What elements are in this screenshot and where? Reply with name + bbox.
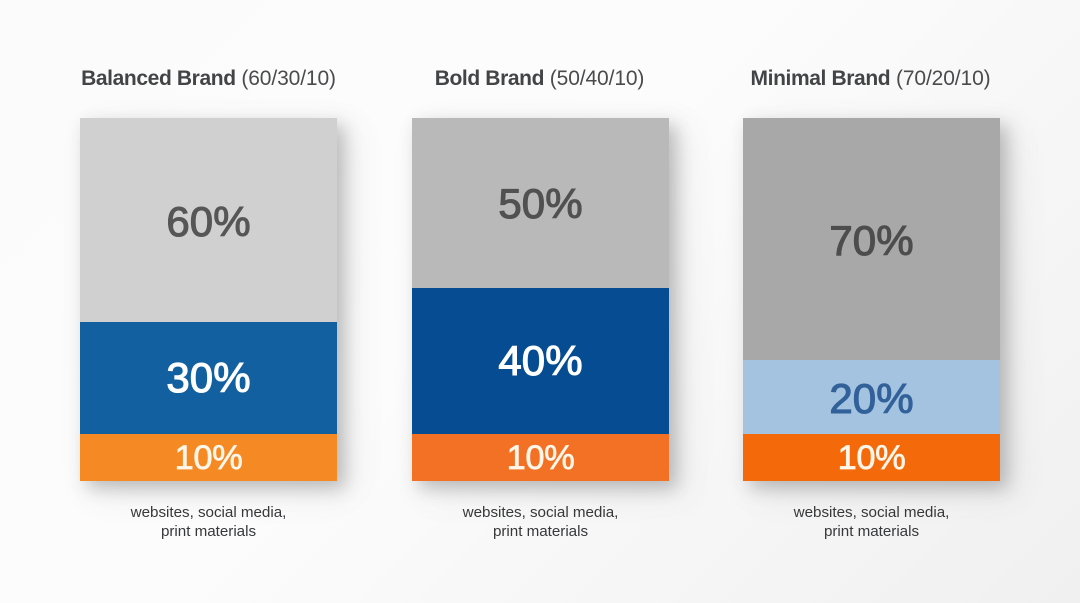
- segment: 10%: [743, 434, 1000, 481]
- segment: 70%: 70%: [829, 217, 914, 264]
- segment: 30%: 30%: [166, 354, 251, 401]
- caption: use cases: [794, 504, 949, 540]
- heading: Bold Brand: Bold Brand (50/40/10): [435, 67, 644, 90]
- segment: 10%: 10%: [175, 438, 242, 476]
- caption: use cases: [130, 504, 286, 540]
- heading: Minimal Brand: Minimal Brand (70/20/10): [750, 67, 990, 90]
- caption: use cases: [462, 504, 618, 540]
- segment: 60%: 60%: [166, 198, 251, 245]
- caption: use cases: websites, social media,: [794, 504, 949, 521]
- segment: 20%: [743, 360, 1000, 434]
- panel: Bold Brand: [408, 67, 691, 540]
- segment: 10%: 10%: [507, 438, 574, 476]
- caption: use cases: websites, social media,: [463, 504, 618, 521]
- segment: 40%: [412, 288, 669, 434]
- stacked bar: 60/30/10: [80, 118, 337, 481]
- segment: 50%: 50%: [498, 180, 583, 227]
- segment: 20%: 20%: [829, 375, 914, 422]
- segment: 60%: [80, 118, 337, 322]
- segment: 30%: [80, 322, 337, 434]
- stacked bar: 70/20/10: [743, 118, 1000, 481]
- caption: use cases: print materials: [824, 522, 919, 540]
- segment: 50%: [412, 118, 669, 288]
- panel: Minimal Brand: [739, 67, 1022, 540]
- panel: Balanced Brand: [76, 67, 359, 540]
- segment: 40%: 40%: [498, 337, 583, 384]
- segment: 10%: 10%: [838, 438, 905, 476]
- segment: 10%: [80, 434, 337, 481]
- segment: 10%: [412, 434, 669, 481]
- heading: Balanced Brand: Balanced Brand (60/30/10): [81, 67, 336, 90]
- caption: use cases: websites, social media,: [131, 504, 286, 521]
- caption: use cases: print materials: [493, 522, 588, 540]
- segment: 70%: [743, 118, 1000, 360]
- caption: use cases: print materials: [161, 522, 256, 540]
- stacked bar: 50/40/10: [412, 118, 669, 481]
